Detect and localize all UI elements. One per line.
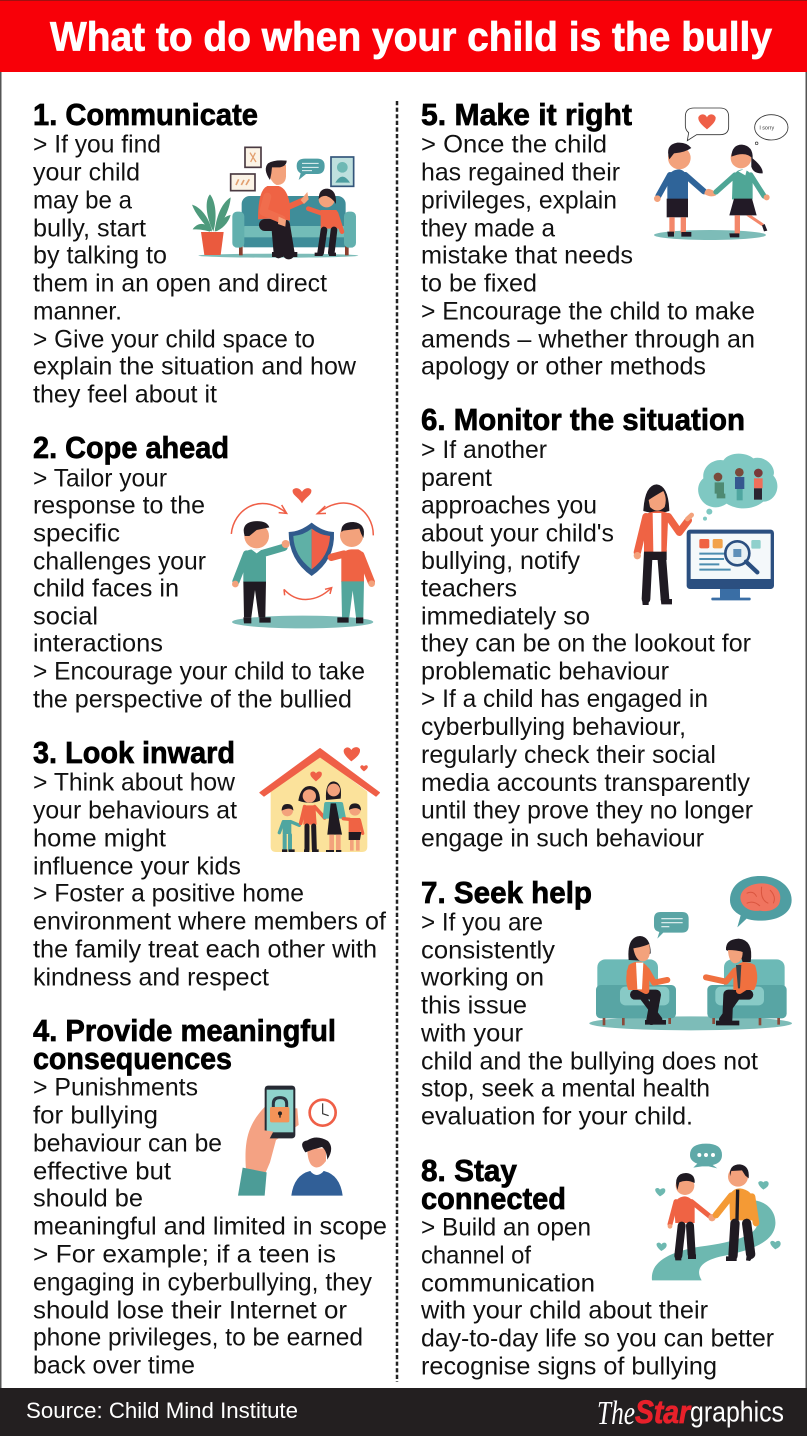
text block: Monitor the situation: engage in such behaviour [421, 824, 704, 852]
heading: Stay connected [421, 1153, 566, 1216]
panel: 2. Cope ahead [33, 430, 375, 714]
heading: Communicate: 1. Communicate [33, 97, 258, 132]
text block: Seek help: with your [420, 1020, 523, 1048]
panel: 3. Look inward [33, 735, 386, 992]
text block: Monitor the situation: parent [421, 464, 492, 492]
text block: Communicate: > If you find [33, 130, 161, 158]
text block: Monitor the situation: immediately so [421, 602, 590, 630]
panel: 8. Stay connected [420, 1144, 781, 1380]
text block: Stay connected: > Build an open [421, 1214, 591, 1242]
text block: Communicate: explain the situation and how [33, 352, 357, 380]
text block: Look inward [33, 768, 386, 992]
text block: Stay connected: recognise signs of bullying [421, 1352, 717, 1380]
text block: Communicate: them in an open and direct [33, 270, 327, 298]
icon: parent, thought cloud and monitor [634, 454, 777, 605]
text block: Communicate: your child [33, 158, 140, 186]
text block: Monitor the situation: > If another [421, 436, 547, 464]
text block: Provide meaningful consequences: effective but [33, 1158, 171, 1186]
text block: Monitor the situation: problematic behaviour [421, 658, 669, 686]
text block: Monitor the situation: regularly check their social [421, 741, 716, 769]
logo: The Star graphics [597, 1394, 784, 1432]
text block: Communicate: bully, start [33, 214, 146, 242]
text block: Communicate: manner. [33, 298, 122, 326]
text block: Communicate [33, 130, 357, 408]
text block: Provide meaningful consequences: phone privileges, to be earned [33, 1324, 363, 1352]
text block: Make it right: privileges, explain [421, 186, 617, 214]
icon: adult and child shaking hands on path [652, 1144, 781, 1280]
text block: Look inward: environment where members of [33, 908, 386, 936]
text block: Look inward: influence your kids [33, 852, 241, 880]
text block: Make it right: > Encourage the child to make [421, 298, 755, 326]
text block: Look inward: > Foster a positive home [33, 880, 304, 908]
text block: Monitor the situation: they can be on the lookout for [421, 630, 751, 658]
text block: Monitor the situation: > If a child has engaged in [421, 685, 708, 713]
text block: Monitor the situation [421, 436, 753, 852]
heading: Look inward: 3. Look inward [33, 735, 235, 770]
footer bar [0, 1388, 807, 1436]
text block: Make it right: mistake that needs [421, 242, 633, 270]
text block: Seek help: working on [420, 964, 544, 992]
text block: Provide meaningful consequences: meaningful and limited in scope [33, 1212, 387, 1240]
icon: two children with shield [231, 488, 375, 628]
text block: Cope ahead: specific [33, 520, 120, 548]
text block: Provide meaningful consequences: engaging in cyberbullying, they [33, 1268, 372, 1296]
text block: Cope ahead: the perspective of the bullied [33, 686, 352, 714]
text block: Make it right: has regained their [421, 158, 620, 186]
text block: Cope ahead: > Encourage your child to take [33, 658, 365, 686]
text block: Monitor the situation: teachers [421, 574, 517, 602]
text block: Seek help: consistently [421, 936, 556, 964]
title: What to do when your child is the bully [50, 14, 772, 60]
text block: Stay connected: day-to-day life so you can better [421, 1324, 774, 1352]
source text: Source: Child Mind Institute [26, 1398, 298, 1423]
panel: 1. Communicate [33, 97, 358, 408]
logo: The Star graphics: The [597, 1395, 635, 1432]
text block: Monitor the situation: approaches you [421, 492, 597, 520]
heading: Monitor the situation: 6. Monitor the situation [421, 402, 745, 437]
text block: Provide meaningful consequences [33, 1074, 387, 1380]
logo: The Star graphics: graphics [690, 1396, 784, 1428]
icon: family in house [260, 747, 379, 852]
icon: counselling session [589, 876, 792, 1030]
panel: 5. Make it right [421, 97, 788, 380]
text block: Seek help: this issue [421, 992, 527, 1020]
text block: Stay connected: communication [421, 1270, 595, 1298]
panel: 4. Provide meaningful consequences [33, 1013, 387, 1380]
text block: Communicate: may be a [33, 186, 132, 214]
text block: Provide meaningful consequences: > Punishments [33, 1074, 198, 1102]
text block: Seek help: child and the bullying does not [421, 1048, 758, 1076]
text block: Cope ahead: social [33, 602, 98, 630]
panel: 7. Seek help [420, 875, 792, 1130]
text block: Communicate: by talking to [33, 242, 167, 270]
text block: Monitor the situation: cyberbullying behaviour, [421, 713, 686, 741]
text block: Look inward: > Think about how [33, 768, 236, 796]
text block: Monitor the situation: bullying, notify [421, 547, 580, 575]
text block: Seek help: evaluation for your child. [421, 1102, 693, 1130]
text block: Look inward: your behaviours at [33, 796, 237, 824]
heading: Seek help: 7. Seek help [421, 875, 592, 910]
text block: Stay connected: channel of [421, 1242, 531, 1270]
text block: Seek help [420, 908, 758, 1130]
text block: Communicate: they feel about it [33, 380, 217, 408]
text block: Provide meaningful consequences: > For example; if a teen is [33, 1240, 336, 1268]
text block: Provide meaningful consequences: back over time [33, 1352, 195, 1380]
text block: Provide meaningful consequences: behaviour can be [33, 1130, 222, 1158]
heading: Provide meaningful consequences [33, 1013, 336, 1076]
text block: Make it right [421, 130, 755, 380]
panel: 6. Monitor the situation [421, 402, 777, 852]
heading: Make it right: 5. Make it right [421, 97, 632, 132]
text block: Communicate: > Give your child space to [33, 326, 315, 354]
text block: Look inward: home might [33, 824, 166, 852]
text block: Monitor the situation: about your child's [421, 520, 614, 548]
text block: Cope ahead: response to the [33, 492, 205, 520]
icon: boy and girl holding hands: I sorry [759, 125, 774, 131]
text block: Provide meaningful consequences: for bullying [33, 1102, 158, 1130]
text block: Seek help: stop, seek a mental health [421, 1074, 710, 1102]
heading: Provide meaningful consequences: 4. Provide meaningful [33, 1013, 336, 1048]
heading: Stay connected: 8. Stay [421, 1153, 518, 1188]
heading: Cope ahead: 2. Cope ahead [33, 430, 229, 465]
text block: Make it right: apology or other methods [421, 352, 706, 380]
text block: Provide meaningful consequences: should lose their Internet or [33, 1296, 347, 1324]
icon: boy and girl holding hands [654, 108, 788, 240]
title bar [0, 0, 807, 72]
text block: Cope ahead [33, 464, 365, 714]
text block: Cope ahead: child faces in [33, 574, 179, 602]
text block: Cope ahead: interactions [33, 630, 163, 658]
text block: Look inward: the family treat each other with [33, 936, 377, 964]
text block: Cope ahead: > Tailor your [33, 464, 167, 492]
text block: Make it right: to be fixed [421, 270, 537, 298]
text block: Stay connected: with your child about their [420, 1296, 708, 1324]
heading: Stay connected: connected [421, 1181, 566, 1216]
text block: Monitor the situation: media accounts transparently [421, 769, 751, 797]
text block: Make it right: they made a [421, 214, 555, 242]
text block: Make it right: > Once the child [421, 130, 607, 158]
icon: parent and child on sofa [192, 147, 358, 258]
icon: locked phone, clock and boy [238, 1086, 343, 1196]
heading: Provide meaningful consequences: consequences [33, 1041, 232, 1076]
text block: Stay connected [420, 1214, 774, 1380]
text block: Look inward: kindness and respect [33, 964, 269, 992]
logo: The Star graphics: Star [635, 1394, 691, 1430]
text block: Monitor the situation: until they prove they no longer [421, 796, 753, 824]
text block: Cope ahead: challenges your [33, 548, 206, 576]
text block: Provide meaningful consequences: should be [33, 1184, 143, 1212]
text block: Seek help: > If you are [421, 908, 543, 936]
text block: Make it right: amends – whether through an [421, 326, 755, 354]
